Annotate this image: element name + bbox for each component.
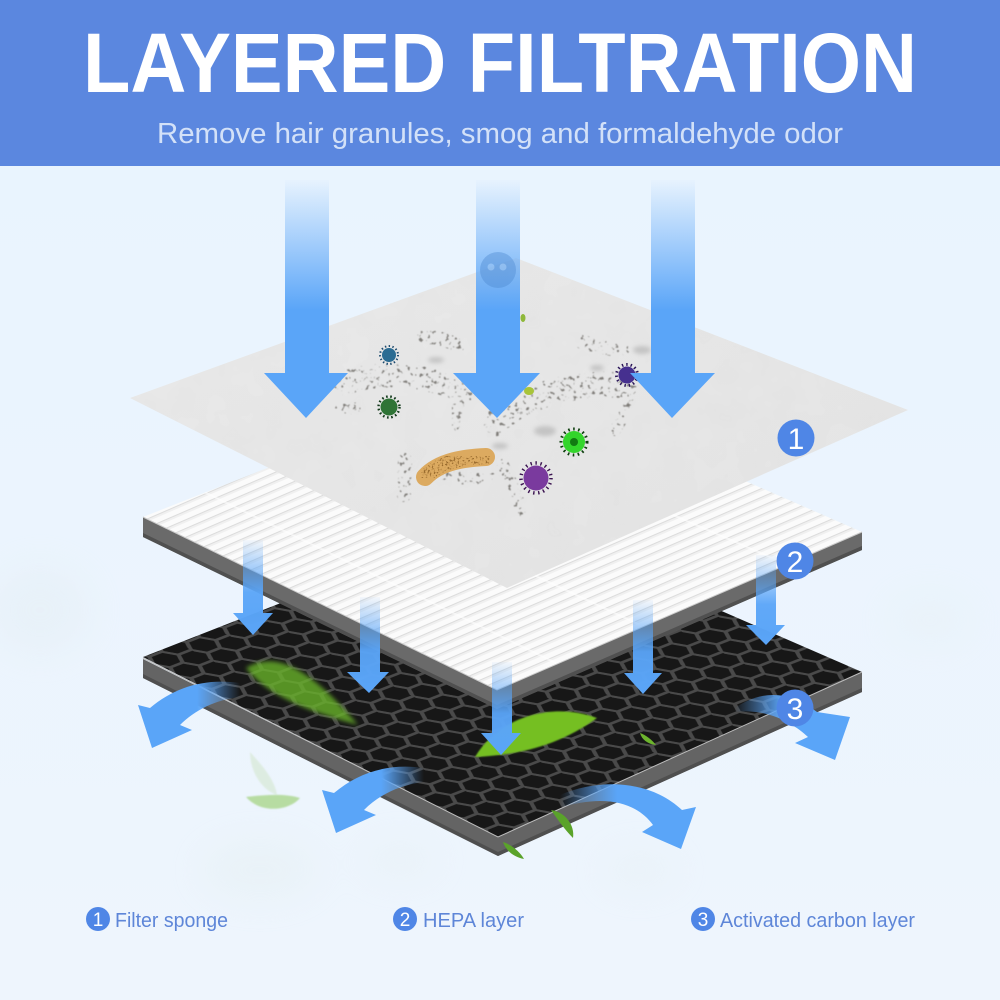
numbered badge 2: 2 xyxy=(787,546,803,579)
numbered badge 3: 3 xyxy=(787,693,803,726)
legend item 3: 3 xyxy=(698,910,708,931)
icon: smog face xyxy=(480,252,516,288)
arrow down 3 xyxy=(630,180,715,418)
legend item 1: 1 xyxy=(93,910,103,931)
curved arrow right lower xyxy=(560,784,696,849)
header banner xyxy=(0,0,1000,166)
legend item 2: HEPA layer xyxy=(423,910,524,932)
legend item 2: 2 xyxy=(400,910,410,931)
curved outflow arrows xyxy=(138,682,850,849)
legend item 1: Filter sponge xyxy=(115,910,228,932)
curved arrow left upper xyxy=(138,682,240,748)
legend xyxy=(86,907,915,932)
layer 3: activated carbon xyxy=(143,516,862,859)
arrow small b xyxy=(347,597,389,693)
subtitle: Remove hair granules, smog and formaldehyde odor xyxy=(157,118,843,150)
icon: microbes xyxy=(378,314,638,493)
numbered badge 1 xyxy=(778,420,814,456)
legend item 1 xyxy=(86,907,228,932)
legend item 2 xyxy=(393,907,524,932)
dust particles xyxy=(340,337,632,510)
big leaves on carbon xyxy=(246,661,656,859)
small downward airflow arrows xyxy=(233,540,785,755)
layer 1: filter sponge xyxy=(130,258,908,588)
legend item 3: Activated carbon layer xyxy=(720,910,915,932)
big downward airflow arrows xyxy=(264,180,715,418)
smudges xyxy=(428,346,651,449)
arrow small d xyxy=(624,600,662,694)
curved arrow left lower xyxy=(322,767,424,833)
numbered badge 1: 1 xyxy=(788,423,804,456)
arrow down 2 xyxy=(453,180,540,418)
arrow small e xyxy=(746,555,785,645)
title: LAYERED FILTRATION xyxy=(83,16,917,110)
faint background haze xyxy=(0,565,970,900)
numbered badge 2 xyxy=(776,542,814,580)
numbered badge 3 xyxy=(776,690,814,726)
arrow down 1 xyxy=(264,180,348,418)
arrow small a xyxy=(233,540,273,635)
arrow small c xyxy=(481,662,521,755)
falling leaves xyxy=(246,752,300,809)
curved arrow right upper xyxy=(735,695,850,760)
layer 2: HEPA filter xyxy=(142,468,862,708)
